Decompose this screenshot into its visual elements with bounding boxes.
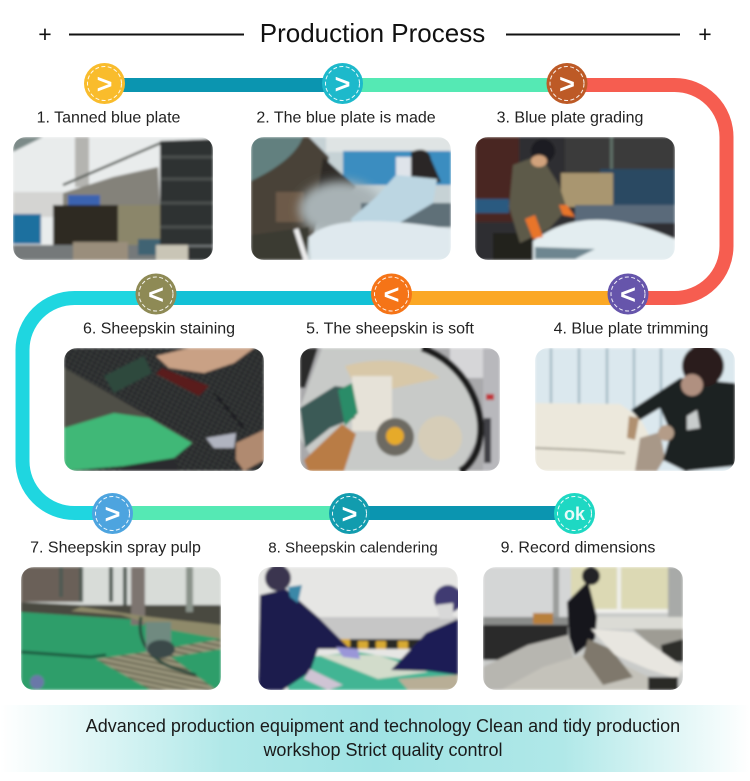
photo 6: staining: [64, 348, 264, 471]
step marker 1: >: [97, 69, 112, 99]
step marker 2: >: [335, 69, 350, 99]
heading text: Production Process: [260, 18, 485, 48]
step marker 3: [546, 63, 588, 104]
photo 1: tanning plant: [13, 137, 213, 260]
step marker 5: <: [384, 280, 399, 310]
step marker 8: [329, 493, 370, 534]
footer text: workshop Strict quality control: [262, 740, 503, 760]
label 2: 2. The blue plate is made: [256, 110, 436, 126]
step marker 9: [554, 493, 595, 534]
label 7: 7. Sheepskin spray pulp: [30, 540, 201, 556]
photo 8: calendering: [258, 565, 462, 690]
step marker 1: [84, 63, 125, 104]
step marker 3: >: [559, 69, 575, 99]
label 8: 8. Sheepskin calendering: [268, 540, 438, 556]
step marker 5: [371, 274, 412, 314]
photo 2: blue plate making: [251, 137, 451, 260]
label 4: 4. Blue plate trimming: [554, 320, 708, 338]
footer band: [0, 705, 750, 772]
title: [38, 18, 712, 48]
plus left: +: [38, 21, 52, 47]
step marker 4: [608, 274, 648, 314]
step marker 6: <: [148, 280, 164, 310]
step marker 7: >: [105, 499, 120, 529]
label 1: 1. Tanned blue plate: [37, 110, 181, 126]
step marker 9: ok: [564, 504, 586, 524]
step marker 8: >: [342, 499, 357, 529]
photo 7: spray pulp: [21, 567, 221, 690]
plus right: +: [698, 21, 712, 47]
photo 5: softening drum: [300, 348, 500, 471]
label 6: 6. Sheepskin staining: [83, 320, 235, 338]
step marker 4: <: [620, 280, 636, 310]
photo 4: trimming: [535, 345, 735, 471]
step marker 2: [322, 63, 363, 104]
label 9: 9. Record dimensions: [501, 540, 655, 556]
photo 3: grading: [475, 137, 675, 260]
label 3: 3. Blue plate grading: [497, 110, 643, 126]
photo 9: record dimensions: [483, 567, 683, 690]
footer text: Advanced production equipment and technology Clean and tidy production: [86, 716, 680, 736]
process track: [22, 85, 726, 513]
step marker 7: [92, 493, 133, 534]
label 5: 5. The sheepskin is soft: [306, 320, 474, 338]
step marker 6: [136, 274, 176, 314]
